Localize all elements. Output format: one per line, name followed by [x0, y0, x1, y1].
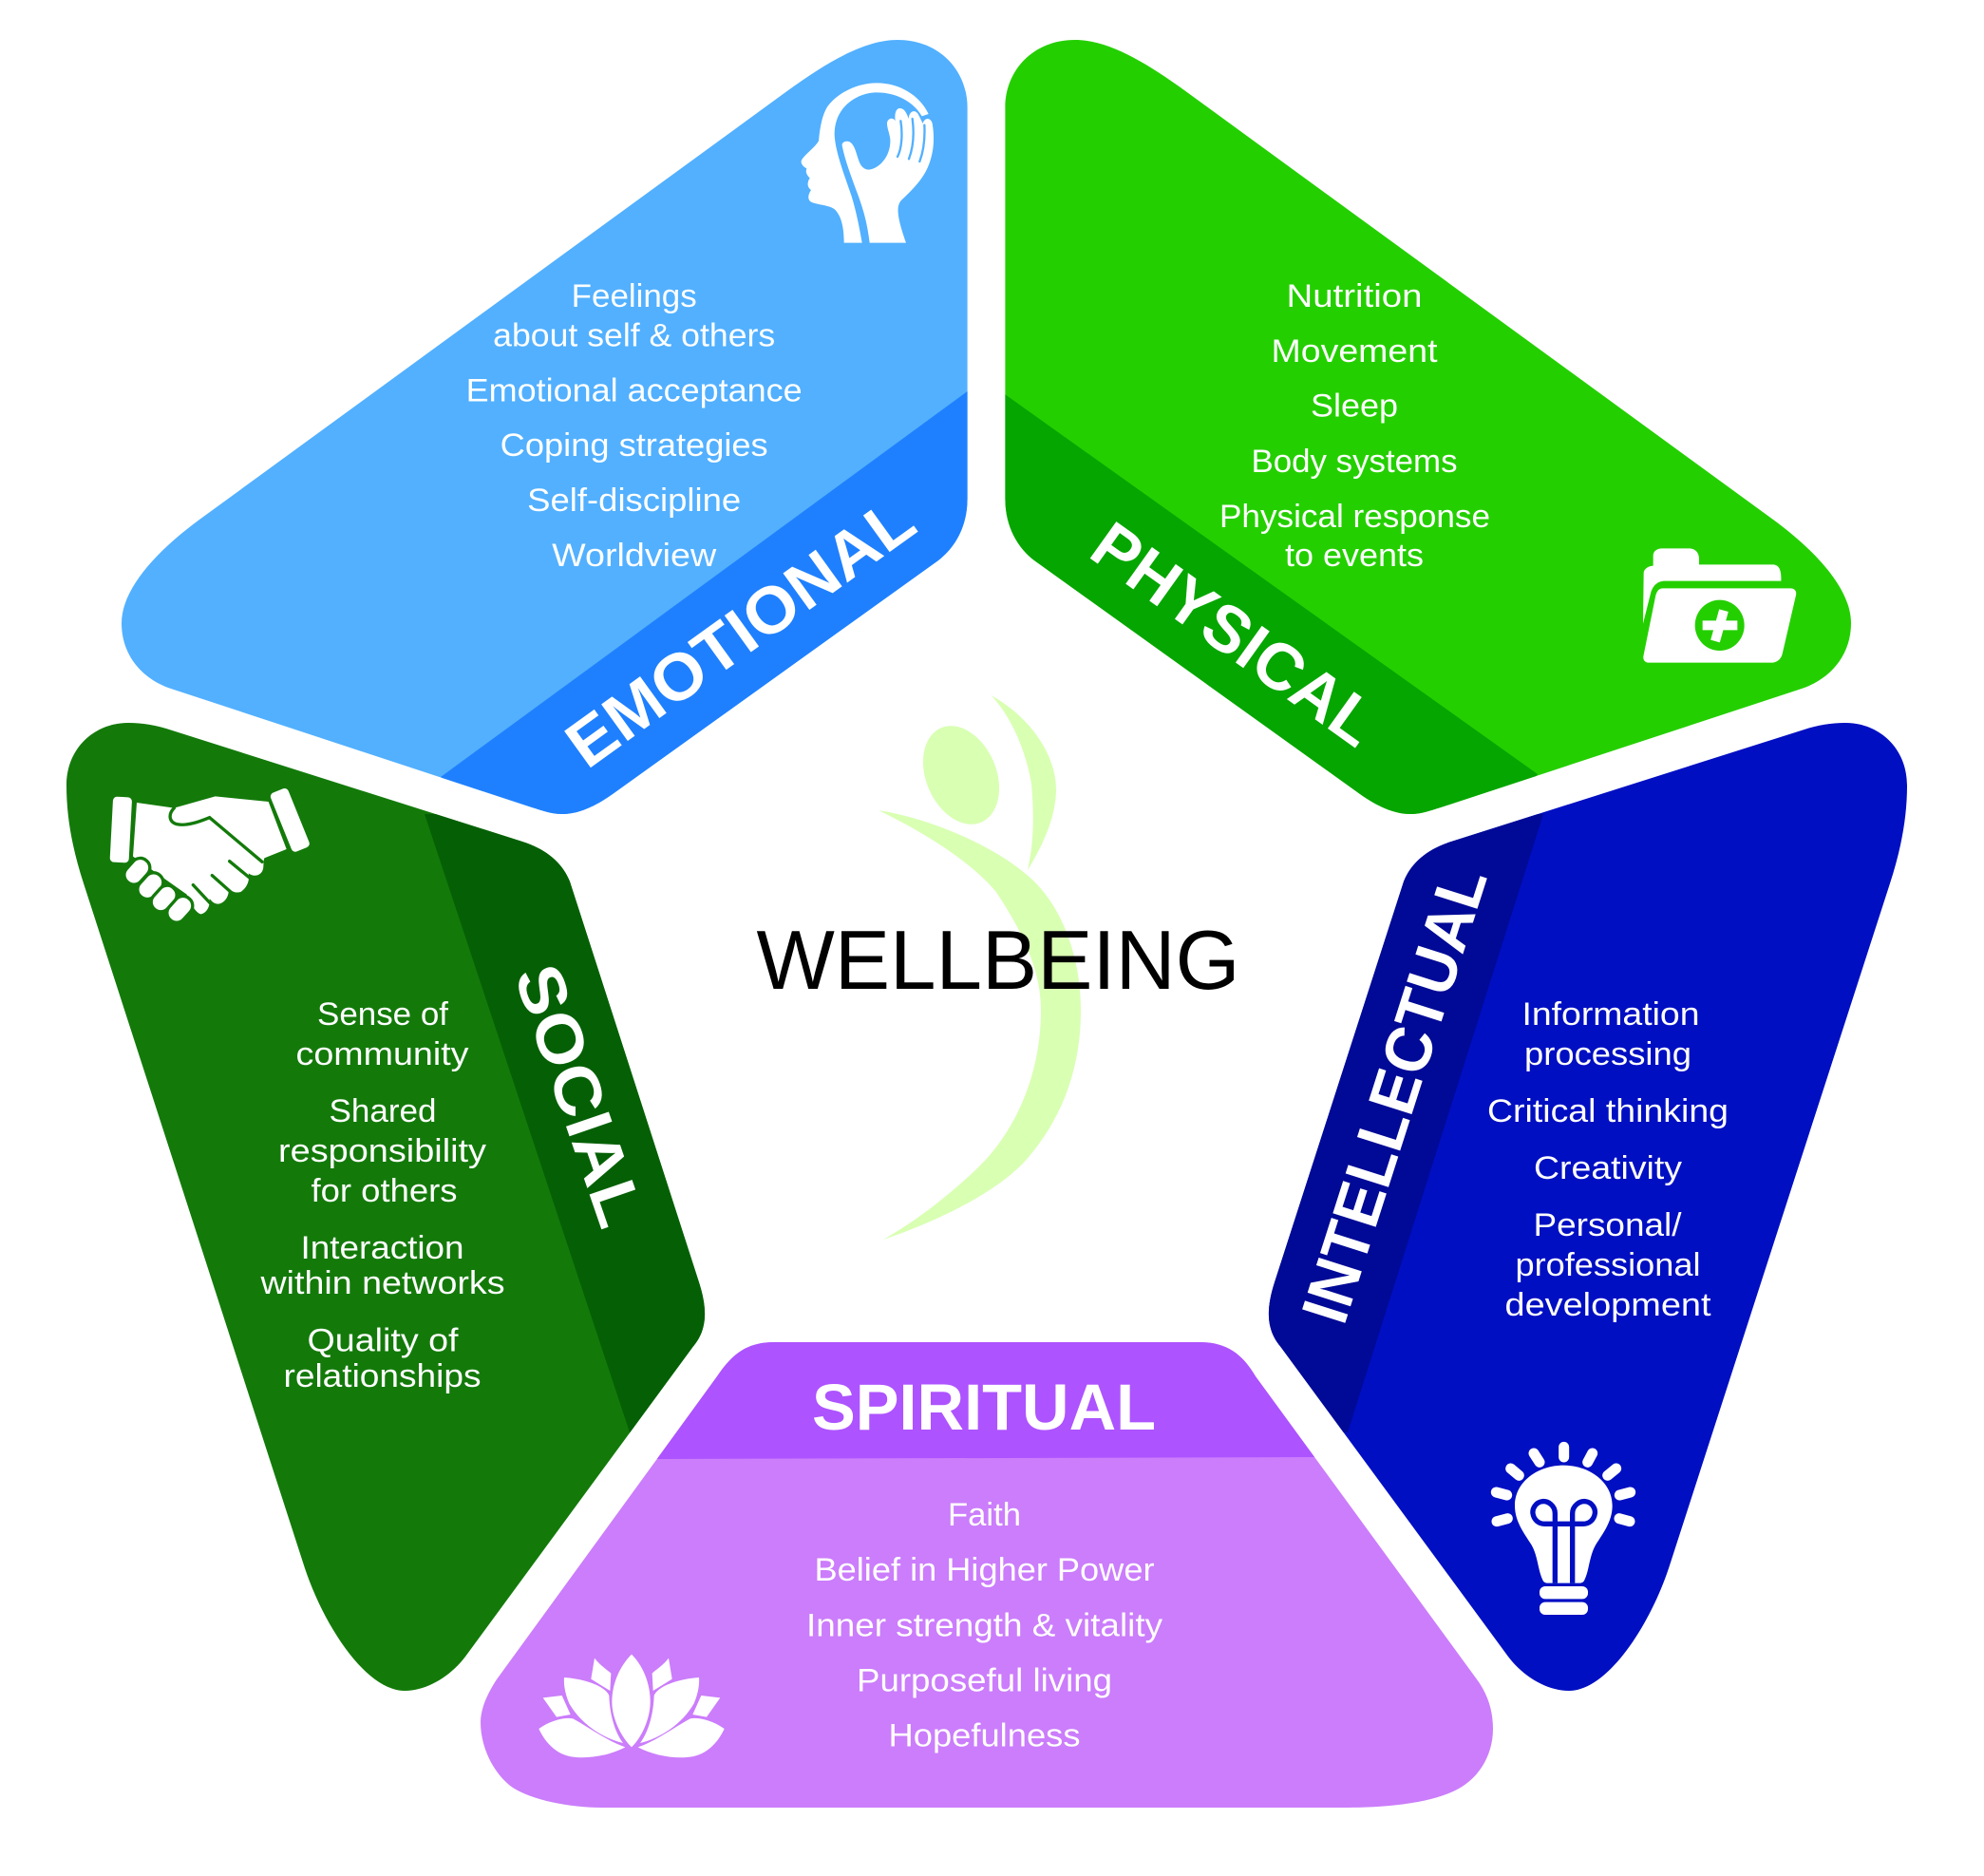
emotional list	[466, 278, 803, 574]
panel: spiritual	[465, 1330, 1510, 1824]
social list: Sense of	[317, 996, 449, 1033]
spiritual panel background	[465, 1330, 1510, 1824]
social list: responsibility	[278, 1133, 486, 1169]
spiritual list: Belief in Higher Power	[815, 1552, 1155, 1588]
physical list: Body systems	[1252, 444, 1457, 480]
emotional list: Feelings	[572, 278, 697, 314]
spiritual list	[806, 1497, 1162, 1753]
physical list	[1219, 278, 1490, 574]
emotional panel background	[122, 40, 968, 814]
intellectual list: Personal/	[1533, 1207, 1682, 1243]
emotional list: Self-discipline	[527, 483, 741, 519]
social heading: SOCIAL	[501, 956, 658, 1236]
intellectual list: Critical thinking	[1487, 1093, 1729, 1129]
panel: physical	[1005, 40, 1851, 814]
social list: Interaction	[300, 1230, 463, 1266]
icon: head and hand	[802, 83, 934, 243]
social list	[259, 996, 505, 1394]
icon: medical folder	[1643, 548, 1796, 663]
emotional list: Worldview	[552, 538, 717, 574]
spiritual heading: SPIRITUAL	[812, 1371, 1156, 1444]
panel: emotional	[122, 40, 968, 814]
panel: intellectual	[1269, 723, 1907, 1691]
intellectual list: Creativity	[1534, 1150, 1682, 1186]
physical panel background	[1005, 40, 1851, 814]
physical list: to events	[1285, 538, 1424, 574]
icon: lotus	[539, 1655, 725, 1757]
icon: light bulb	[1496, 1447, 1631, 1615]
intellectual heading: INTELLECTUAL	[1288, 859, 1502, 1332]
panel: social	[66, 723, 705, 1691]
emotional list: Emotional acceptance	[466, 372, 803, 408]
intellectual list: development	[1504, 1287, 1711, 1323]
social list: Quality of	[308, 1322, 459, 1358]
social list: for others	[312, 1173, 458, 1209]
emotional list: about self & others	[493, 317, 775, 353]
spiritual list: Purposeful living	[857, 1662, 1112, 1698]
spiritual list: Hopefulness	[889, 1717, 1081, 1753]
spiritual list: Inner strength & vitality	[806, 1607, 1162, 1643]
emotional heading: EMOTIONAL	[553, 483, 928, 782]
physical list: Sleep	[1311, 388, 1398, 424]
physical list: Movement	[1271, 333, 1438, 370]
social list: relationships	[283, 1358, 481, 1394]
stick figure logo	[879, 695, 1081, 1240]
physical list: Physical response	[1219, 499, 1490, 535]
intellectual list: professional	[1516, 1247, 1700, 1283]
social panel background	[66, 723, 705, 1691]
physical list: Nutrition	[1286, 278, 1423, 314]
intellectual list: processing	[1524, 1036, 1691, 1072]
intellectual panel background	[1269, 723, 1907, 1691]
icon: handshake	[110, 787, 311, 926]
social list: Shared	[329, 1093, 437, 1129]
social list: community	[296, 1036, 469, 1072]
social list: within networks	[259, 1265, 505, 1301]
title: WELLBEING	[756, 913, 1240, 1007]
physical heading: PHYSICAL	[1078, 508, 1391, 761]
emotional list: Coping strategies	[501, 427, 768, 464]
intellectual list: Information	[1521, 996, 1700, 1033]
intellectual list	[1487, 996, 1729, 1323]
spiritual list: Faith	[948, 1497, 1021, 1533]
